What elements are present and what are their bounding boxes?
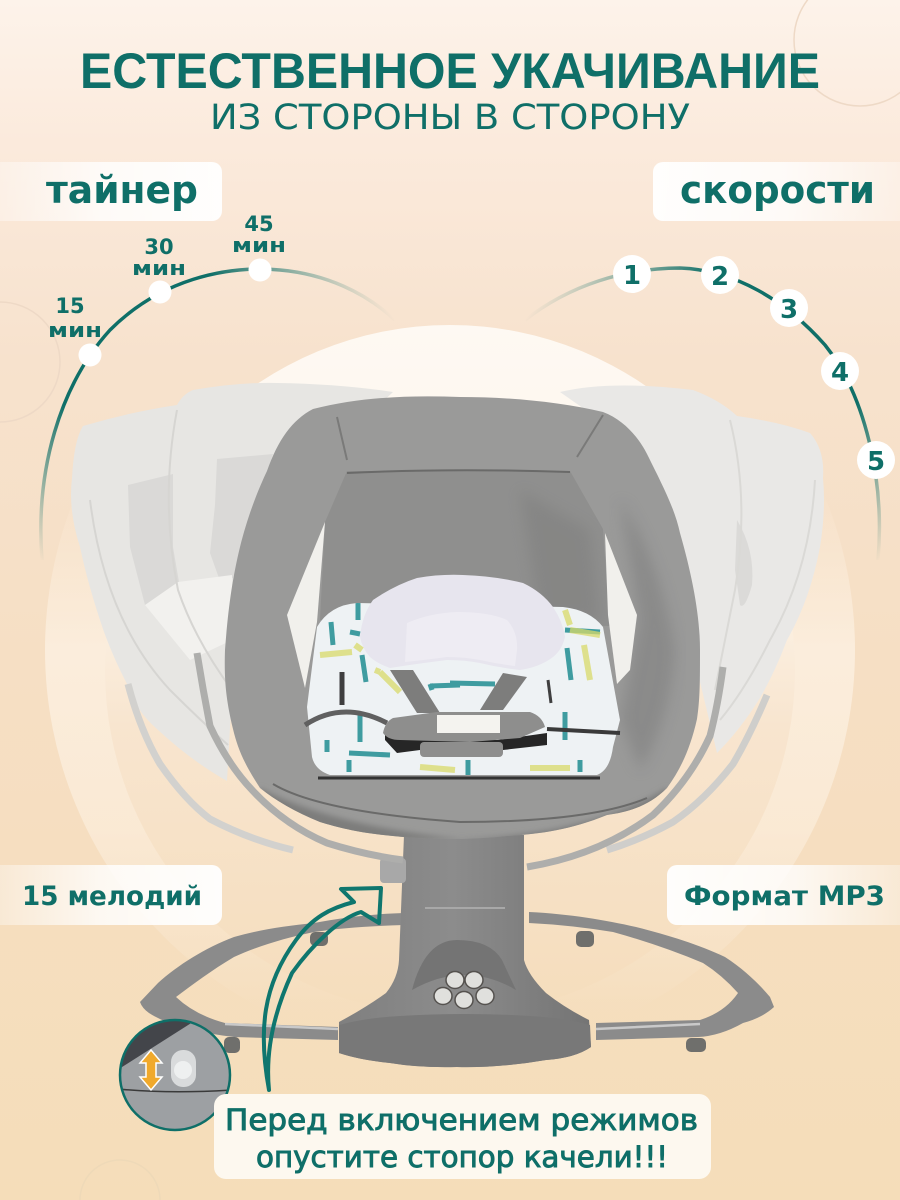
- title: ИЗ СТОРОНЫ В СТОРОНУ: [210, 98, 690, 138]
- inset: stopper detail: [118, 1020, 233, 1130]
- buckle logo: [437, 715, 500, 733]
- timer arc with dots: мин: [132, 256, 186, 280]
- harness straps: [305, 670, 620, 757]
- head support: [360, 575, 565, 670]
- swing: support rails: [128, 653, 767, 867]
- label: melodies: [0, 865, 222, 925]
- icon: orange double arrow: [140, 1050, 162, 1090]
- callout: warning: Перед включением режимов: [225, 1103, 698, 1137]
- label: timer: [0, 162, 222, 221]
- title: ЕСТЕСТВЕННОЕ УКАЧИВАНИЕ: [80, 43, 820, 99]
- speed arc with numbers: 2: [711, 262, 729, 292]
- side windows: [287, 522, 325, 688]
- label: melodies: 15 мелодий: [22, 881, 202, 912]
- seat rim shading: [250, 500, 680, 840]
- arrow to stopper: [264, 888, 381, 1090]
- ring feet: [224, 931, 706, 1053]
- label: speeds: [653, 162, 900, 221]
- label: speeds: скорости: [680, 168, 875, 212]
- swing: column and foot: [339, 835, 591, 1067]
- timer arc with dots: [41, 212, 395, 560]
- timer arc with dots: мин: [232, 233, 286, 257]
- swing: seat: [225, 396, 700, 840]
- seat outer shell: [225, 396, 700, 839]
- timer arc with dots: 45: [244, 212, 274, 236]
- speed arc with numbers: 4: [831, 358, 849, 388]
- ghost seat: left: [71, 383, 393, 781]
- speed arc with numbers: 1: [623, 261, 641, 291]
- swing: base ring: [140, 912, 774, 1053]
- ghost seat: right: [560, 385, 824, 753]
- callout: warning: [214, 1094, 711, 1179]
- speed arc with numbers: [525, 255, 895, 560]
- seat back panel: [320, 471, 610, 626]
- label: MP3 format: [667, 865, 900, 925]
- timer arc with dots: 15: [55, 294, 85, 318]
- callout: warning: опустите стопор качели!!!: [256, 1140, 668, 1174]
- title: [80, 43, 820, 138]
- label: MP3 format: Формат MP3: [684, 881, 885, 912]
- pad with pattern: [307, 602, 620, 775]
- speed arc with numbers: 3: [780, 295, 798, 325]
- speed arc with numbers: 5: [867, 447, 885, 477]
- control buttons: [434, 972, 494, 1008]
- timer arc with dots: мин: [48, 318, 102, 342]
- label: timer: тайнер: [46, 168, 198, 212]
- timer arc with dots: 30: [144, 235, 174, 259]
